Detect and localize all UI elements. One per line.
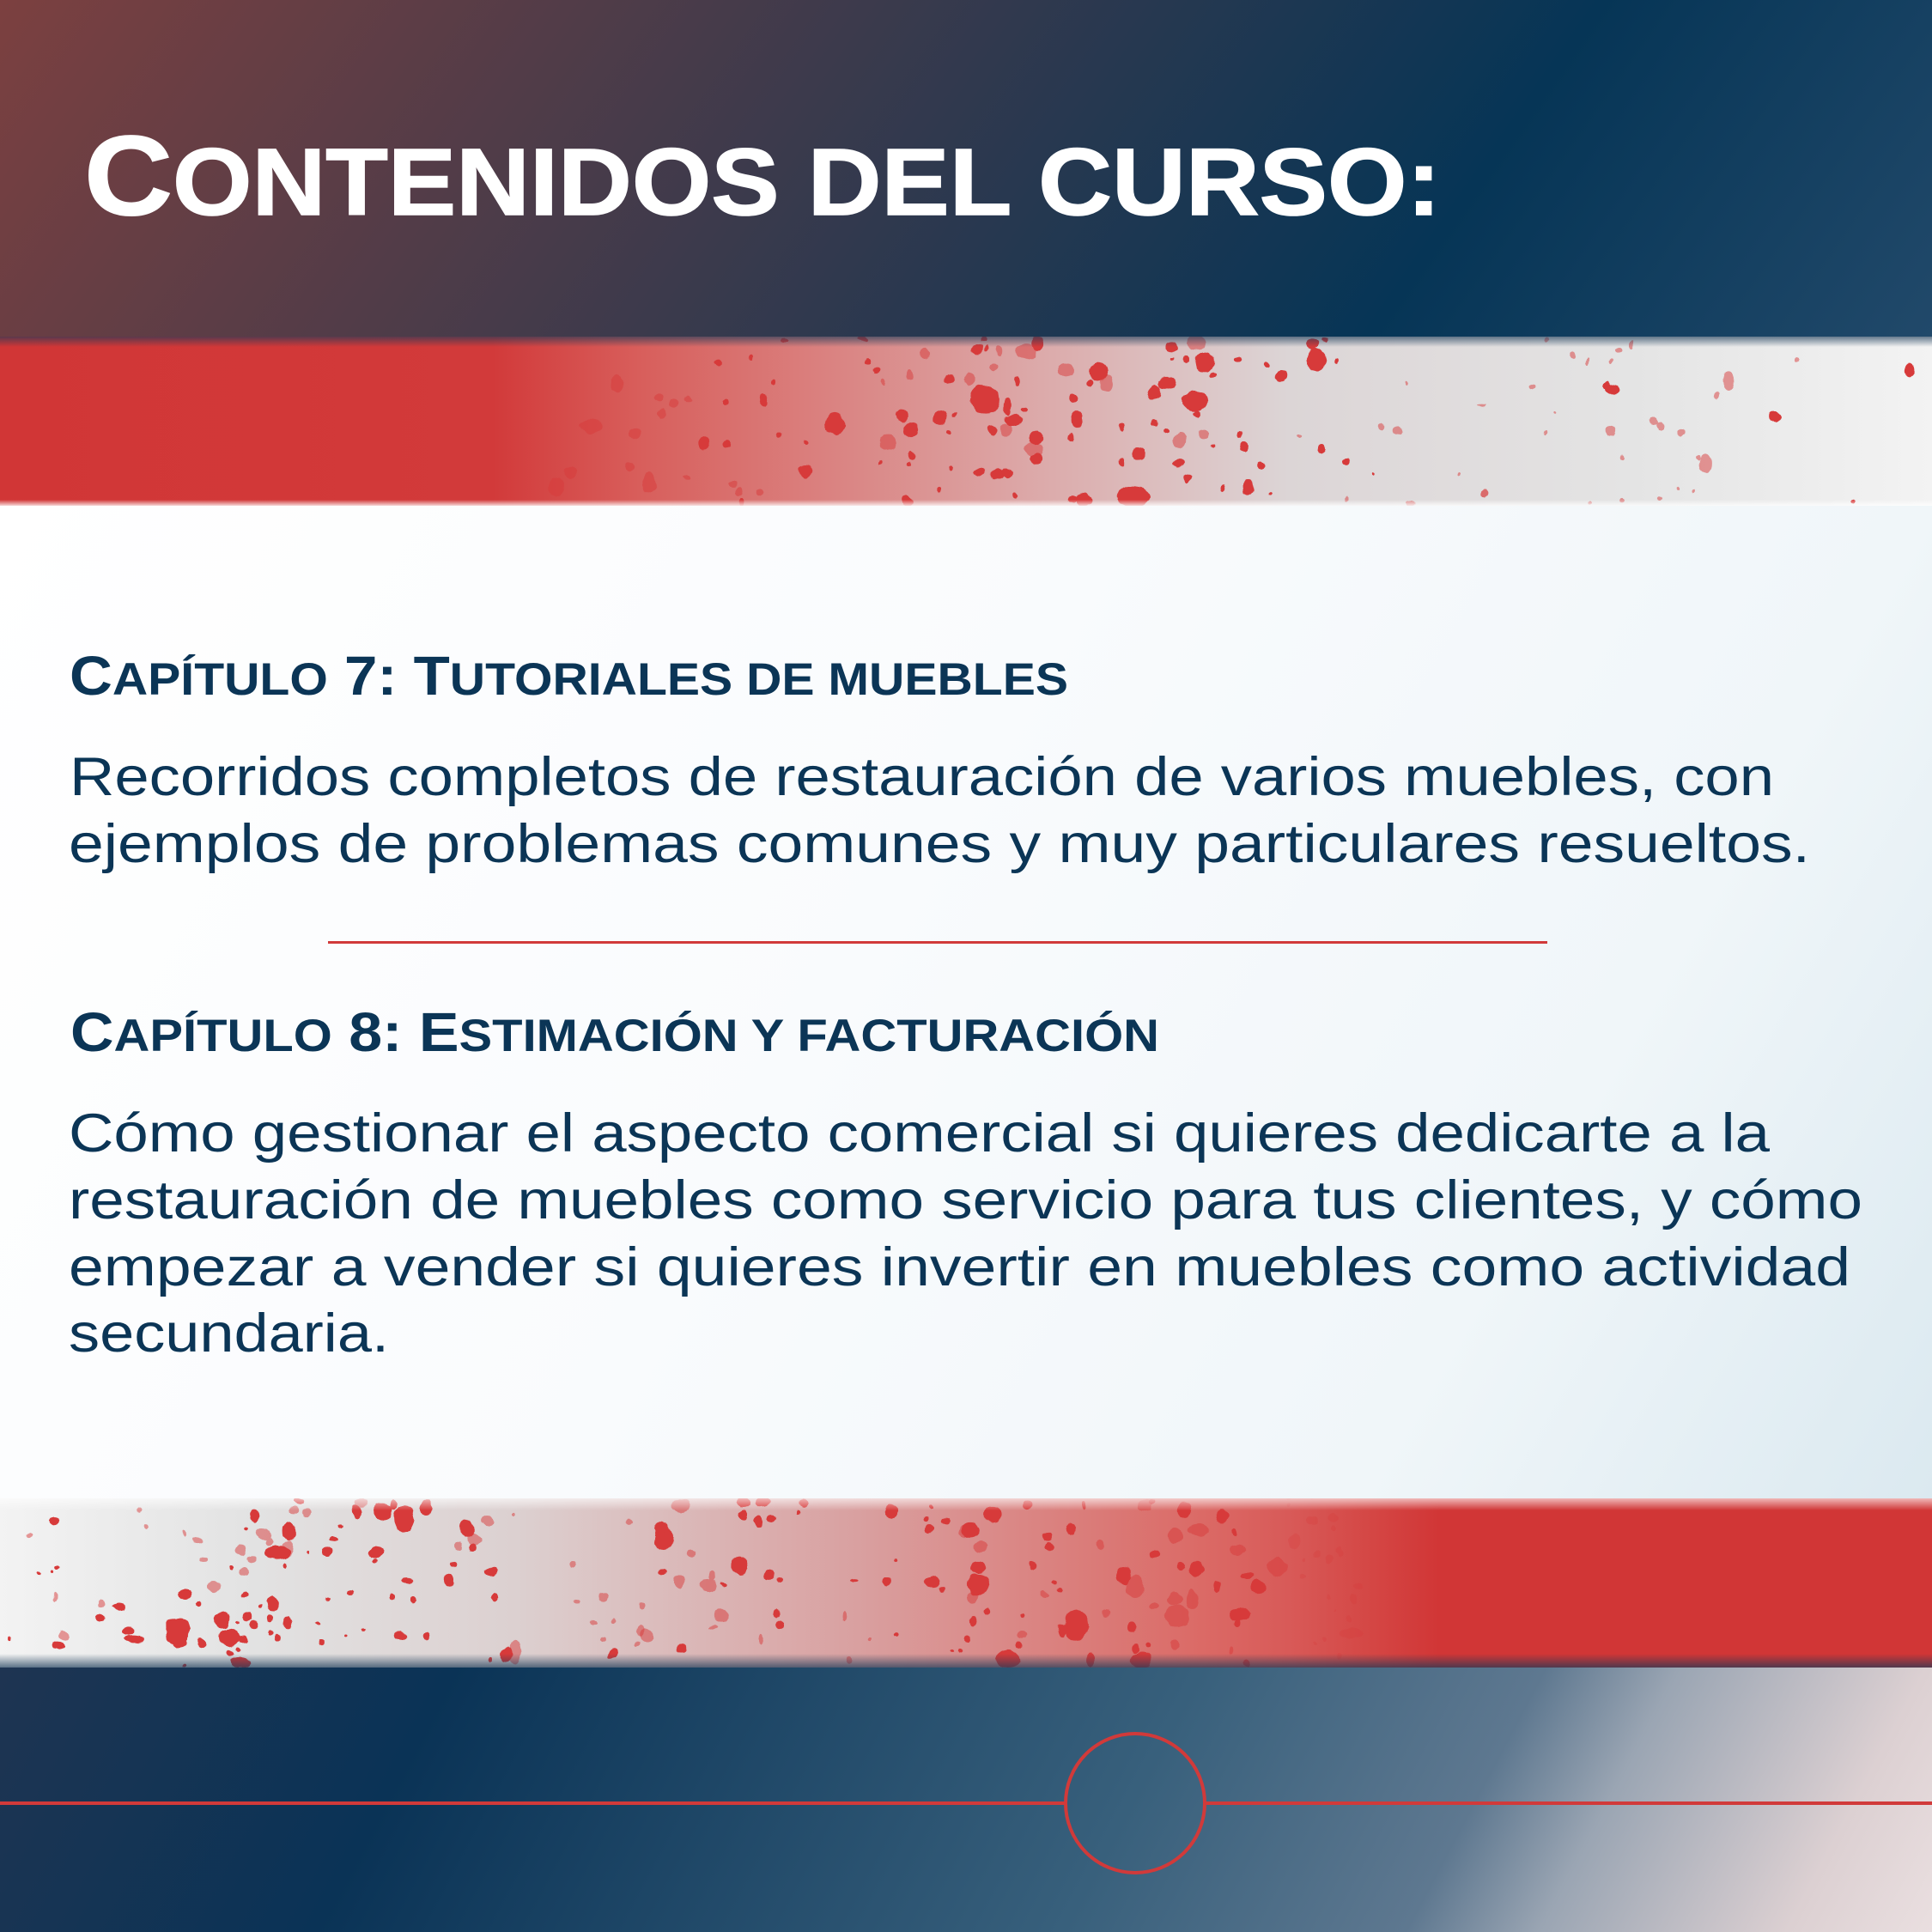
top paint splatter band [0,334,1932,507]
header band [0,0,1932,337]
chapter 8 heading: CAPÍTULO 8: ESTIMACIÓN Y FACTURACIÓN [70,1001,1159,1063]
chapter 8 body text: restauración de muebles como servicio para tus clientes, y cómo [69,1170,1862,1230]
footer band [0,1668,1932,1932]
chapter 8 body text: empezar a vender si quieres invertir en muebles como actividad [69,1237,1850,1297]
chapter 7 heading: CAPÍTULO 7: TUTORIALES DE MUEBLES [70,645,1068,707]
footer line and circle ornament [0,1734,1932,1873]
chapter 8 body text: Cómo gestionar el aspecto comercial si quieres dedicarte a la [69,1103,1771,1163]
chapter 8 body text [69,1103,1862,1364]
chapter 8 body text: secundaria. [69,1303,389,1364]
title: CONTENIDOS DEL CURSO: [84,112,1441,239]
chapter 7 body text: Recorridos completos de restauración de varios muebles, con [70,747,1774,807]
chapter 7 body text: ejemplos de problemas comunes y muy particulares resueltos. [69,814,1810,874]
chapter 7 body text [69,747,1810,874]
divider [328,941,1547,944]
bottom paint splatter band [0,1498,1932,1668]
content background [0,506,1932,1498]
